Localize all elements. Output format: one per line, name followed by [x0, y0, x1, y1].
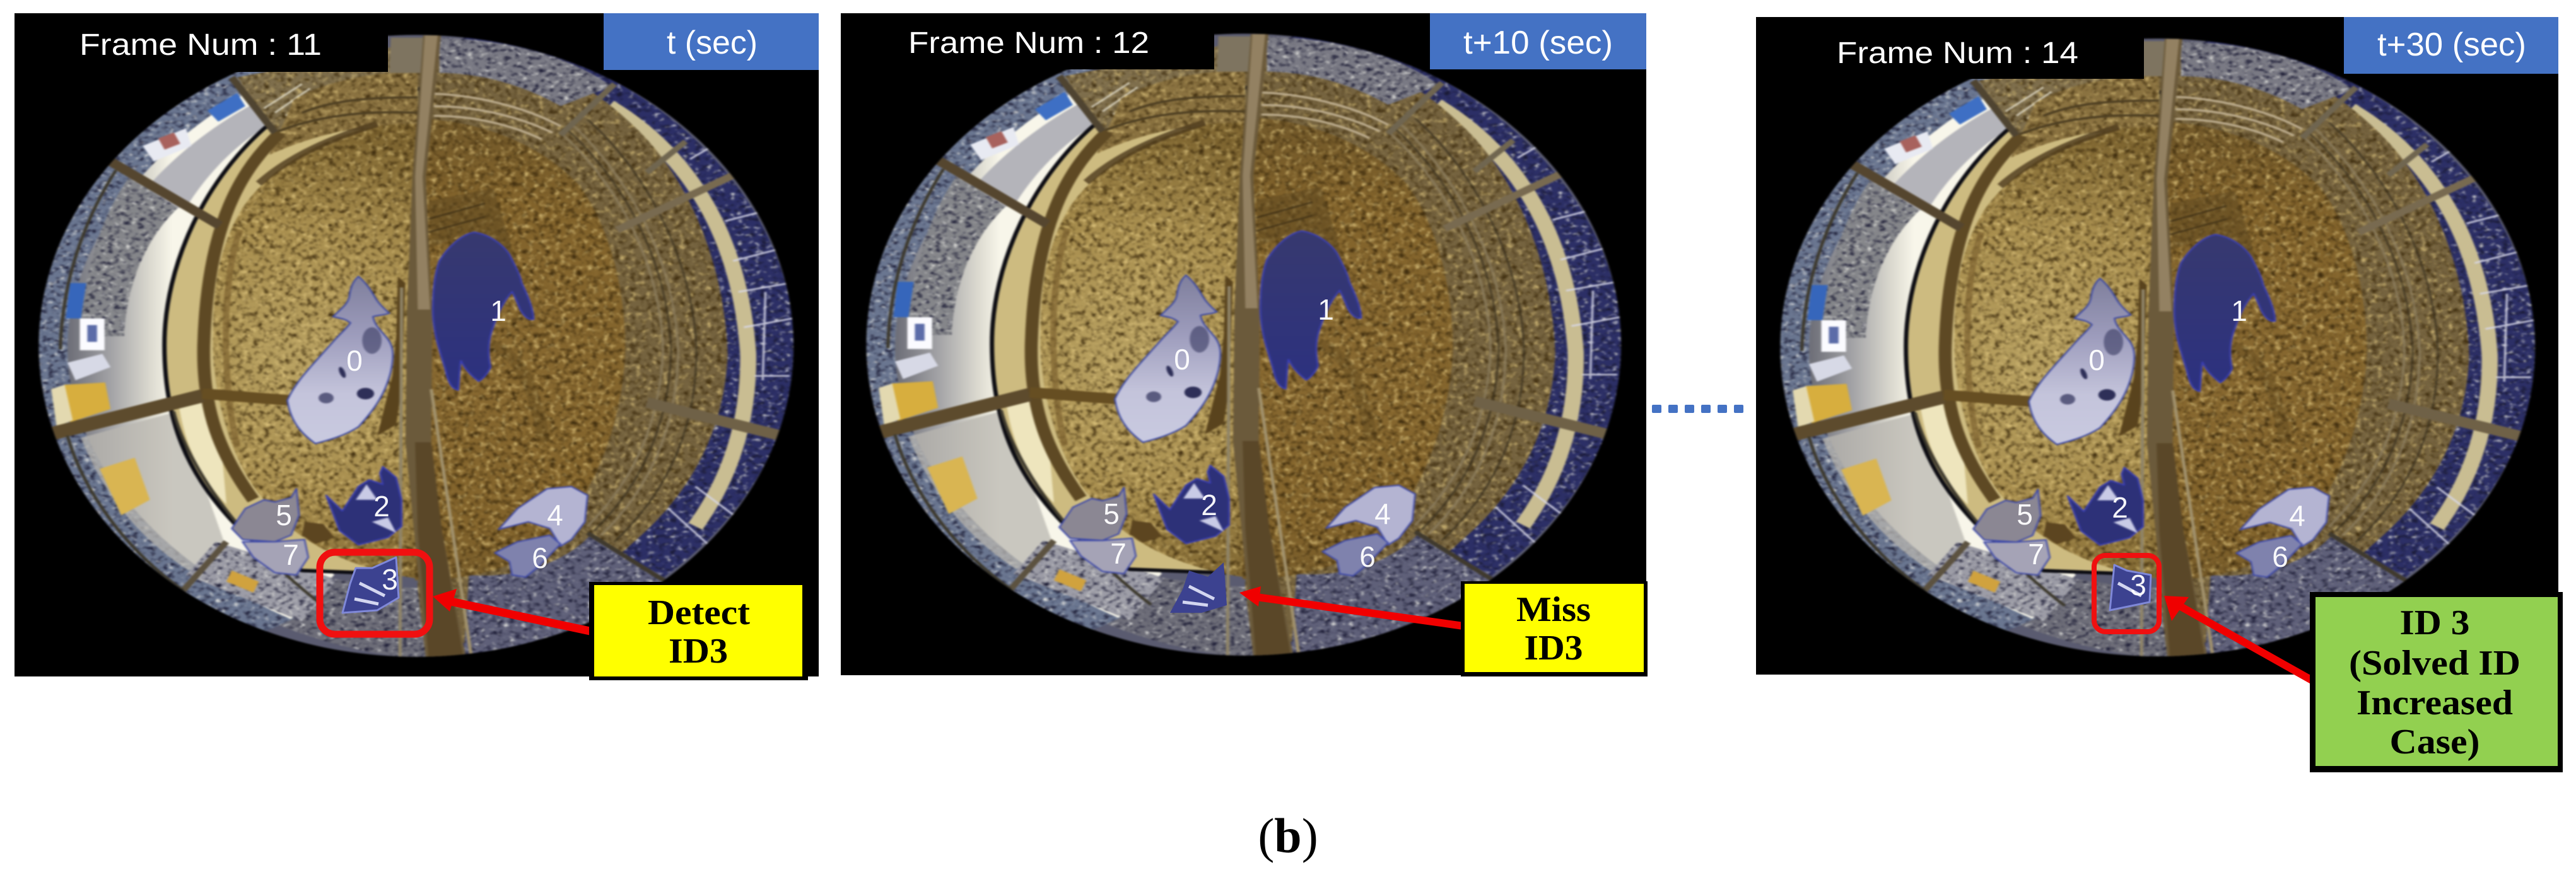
id labels: 4: [1374, 497, 1391, 530]
id labels: 7: [1110, 537, 1127, 570]
id labels: [2017, 294, 2305, 601]
id labels: 4: [2289, 499, 2305, 532]
time tag: [604, 13, 819, 70]
panel: frame 11: [15, 13, 819, 680]
frame number bar: [1756, 17, 2144, 79]
callout: solved: Case): [2389, 722, 2480, 762]
frame number: Frame Num : 11: [79, 28, 322, 62]
cow 3 detected: [342, 557, 399, 613]
callout: miss: [1461, 581, 1648, 676]
id labels: 0: [2088, 344, 2105, 376]
arrow: [1239, 586, 1463, 626]
id labels: 6: [2272, 540, 2288, 573]
callout: detect: [589, 582, 808, 680]
id labels: 1: [1318, 293, 1334, 326]
frame number bar: [841, 13, 1214, 69]
time tag text: t (sec): [667, 25, 758, 61]
cow 3 recovered: [2110, 565, 2151, 610]
callout: miss: Miss: [1516, 590, 1591, 629]
id labels: 7: [283, 538, 299, 571]
id labels: 2: [1201, 489, 1217, 521]
arrow: [2164, 596, 2313, 681]
id labels: 2: [373, 490, 390, 523]
id labels: 7: [2028, 538, 2044, 571]
panel: frame 14: [1756, 17, 2563, 772]
time tag text: t+10 (sec): [1463, 25, 1613, 61]
id labels: 0: [346, 344, 363, 377]
callout: detect: Detect: [648, 593, 750, 632]
id labels: 1: [490, 294, 506, 327]
callout: detect: ID3: [669, 632, 728, 671]
id labels: [1103, 293, 1391, 573]
time tag text: t+30 (sec): [2377, 26, 2526, 63]
time tag: [2344, 17, 2558, 74]
id labels: 5: [2017, 498, 2033, 531]
image background: [15, 13, 819, 676]
dotted continuation line: [1652, 405, 1743, 413]
image background: [841, 13, 1646, 675]
highlight box: [320, 552, 430, 634]
callout: solved: ID 3: [2399, 603, 2470, 642]
id labels: 2: [2112, 491, 2128, 524]
id labels: 5: [276, 499, 292, 531]
id labels: 3: [382, 563, 398, 596]
frame number: Frame Num : 14: [1837, 37, 2078, 70]
frame number: Frame Num : 12: [908, 26, 1149, 60]
id labels: 0: [1174, 343, 1190, 376]
highlight box: [2094, 555, 2159, 632]
id labels: 5: [1103, 497, 1120, 530]
id labels: 6: [1359, 540, 1376, 573]
id labels: 1: [2231, 294, 2247, 327]
id labels: 4: [547, 499, 563, 531]
callout: solved: (Solved ID: [2349, 644, 2520, 683]
fisheye camera view: [860, 30, 1625, 658]
id labels: 6: [532, 542, 548, 574]
caption: (b): [1258, 808, 1318, 863]
image background: [1756, 17, 2558, 675]
time tag: [1430, 13, 1646, 69]
missed cow 3: [1170, 562, 1227, 613]
fisheye camera view: [1774, 35, 2539, 659]
fisheye camera view: [32, 31, 798, 659]
frame number bar: [15, 13, 388, 72]
callout: solved: [2310, 592, 2563, 772]
id labels: [276, 294, 563, 596]
arrow: [433, 589, 593, 632]
callout: miss: ID3: [1524, 629, 1583, 668]
callout: solved: Increased: [2356, 683, 2513, 722]
id labels: 3: [2130, 569, 2146, 601]
panel: frame 12: [841, 13, 1648, 676]
